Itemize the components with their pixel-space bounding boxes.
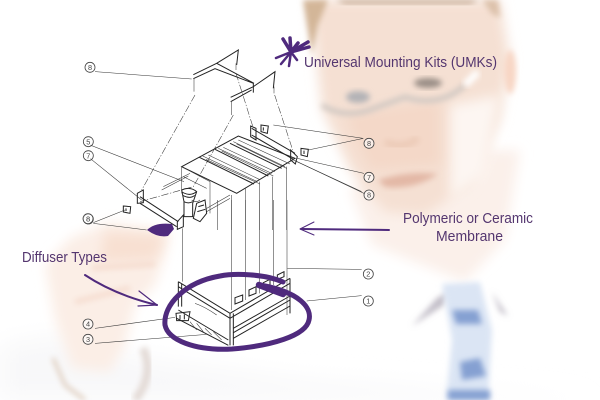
number 8 <box>83 214 93 224</box>
leader lines <box>90 72 364 223</box>
number 3: 3 <box>86 335 90 344</box>
nose and mid-face tone <box>345 100 440 170</box>
icon: purple ink asterisk <box>276 38 309 66</box>
small mounting brackets <box>123 125 308 213</box>
tie pattern <box>448 310 490 400</box>
number 8 lower left: 8 <box>86 215 90 224</box>
arrow to membrane <box>300 222 389 235</box>
label: Polymeric or Ceramic Membrane <box>403 211 533 245</box>
label: Universal Mounting Kits: Universal Mounting Kits (UMKs) <box>304 55 497 71</box>
number 8 upper right: 8 <box>367 139 371 148</box>
callout circles <box>83 214 373 344</box>
number 8: 8 <box>86 214 90 223</box>
right eye <box>414 78 442 88</box>
number 3 <box>83 334 93 344</box>
technical diagram, lower part <box>83 200 373 345</box>
label: Diffuser Types: Diffuser Types <box>22 250 107 266</box>
number 5 <box>83 137 93 147</box>
label: Polymeric or Ceramic Membrane: Polymeric or Ceramic <box>403 211 533 227</box>
number 1 <box>363 296 373 306</box>
number 8 lower left <box>83 214 93 224</box>
diffuser box <box>177 278 290 345</box>
number 4: 4 <box>86 320 90 329</box>
number 2: 2 <box>366 270 370 279</box>
number 8 top left: 8 <box>88 63 92 72</box>
number 8 right: 8 <box>367 191 371 200</box>
hair left <box>303 0 328 55</box>
vertical rods <box>217 167 287 230</box>
shirt shading <box>0 335 600 400</box>
number 8 right <box>364 190 374 200</box>
marker pen tip <box>147 224 174 236</box>
sleeve left edge <box>53 358 85 400</box>
hair top <box>335 0 480 4</box>
arrow to diffuser <box>85 275 157 306</box>
right cheek highlight <box>450 95 500 200</box>
bracket 2 <box>231 72 275 115</box>
number 7 left: 7 <box>86 151 90 160</box>
sleeve right edge <box>135 348 148 400</box>
number 8 top left <box>85 62 95 72</box>
membrane rods <box>182 200 287 315</box>
technical diagram, upper part <box>83 50 374 230</box>
leader lines <box>93 223 362 343</box>
dash-dot cables <box>140 73 293 202</box>
pump assembly <box>182 167 210 222</box>
collar shadows <box>412 292 508 326</box>
slots on membranes <box>235 272 284 304</box>
ellipse marker start <box>259 285 283 294</box>
hair right <box>482 0 500 18</box>
number 4 <box>83 319 93 329</box>
brows and glasses <box>322 85 465 113</box>
neck <box>350 150 520 282</box>
cross rails <box>140 128 362 227</box>
number 1: 1 <box>366 297 370 306</box>
mouth <box>378 173 438 187</box>
top frame <box>182 136 295 193</box>
number 2 <box>363 269 373 279</box>
glasses glint <box>465 72 478 85</box>
number 5: 5 <box>86 137 90 146</box>
callout circles <box>83 62 374 224</box>
finger shadows <box>75 264 155 302</box>
purple hand-drawn ellipse around diffuser <box>165 274 309 349</box>
nose <box>385 138 418 145</box>
tie <box>442 282 492 400</box>
rail end plates <box>137 126 297 229</box>
valve on box <box>176 312 190 321</box>
number 7 right: 7 <box>367 173 371 182</box>
bracket 1 <box>193 50 254 93</box>
number 7 left <box>83 151 93 161</box>
label: Polymeric or Ceramic Membrane: Membrane <box>436 229 503 245</box>
ear <box>504 50 516 94</box>
finger tone <box>100 232 165 262</box>
hand <box>45 222 170 372</box>
number 8 upper right <box>364 138 374 148</box>
face <box>310 0 510 215</box>
left eye <box>346 91 370 103</box>
number 7 right <box>364 172 374 182</box>
